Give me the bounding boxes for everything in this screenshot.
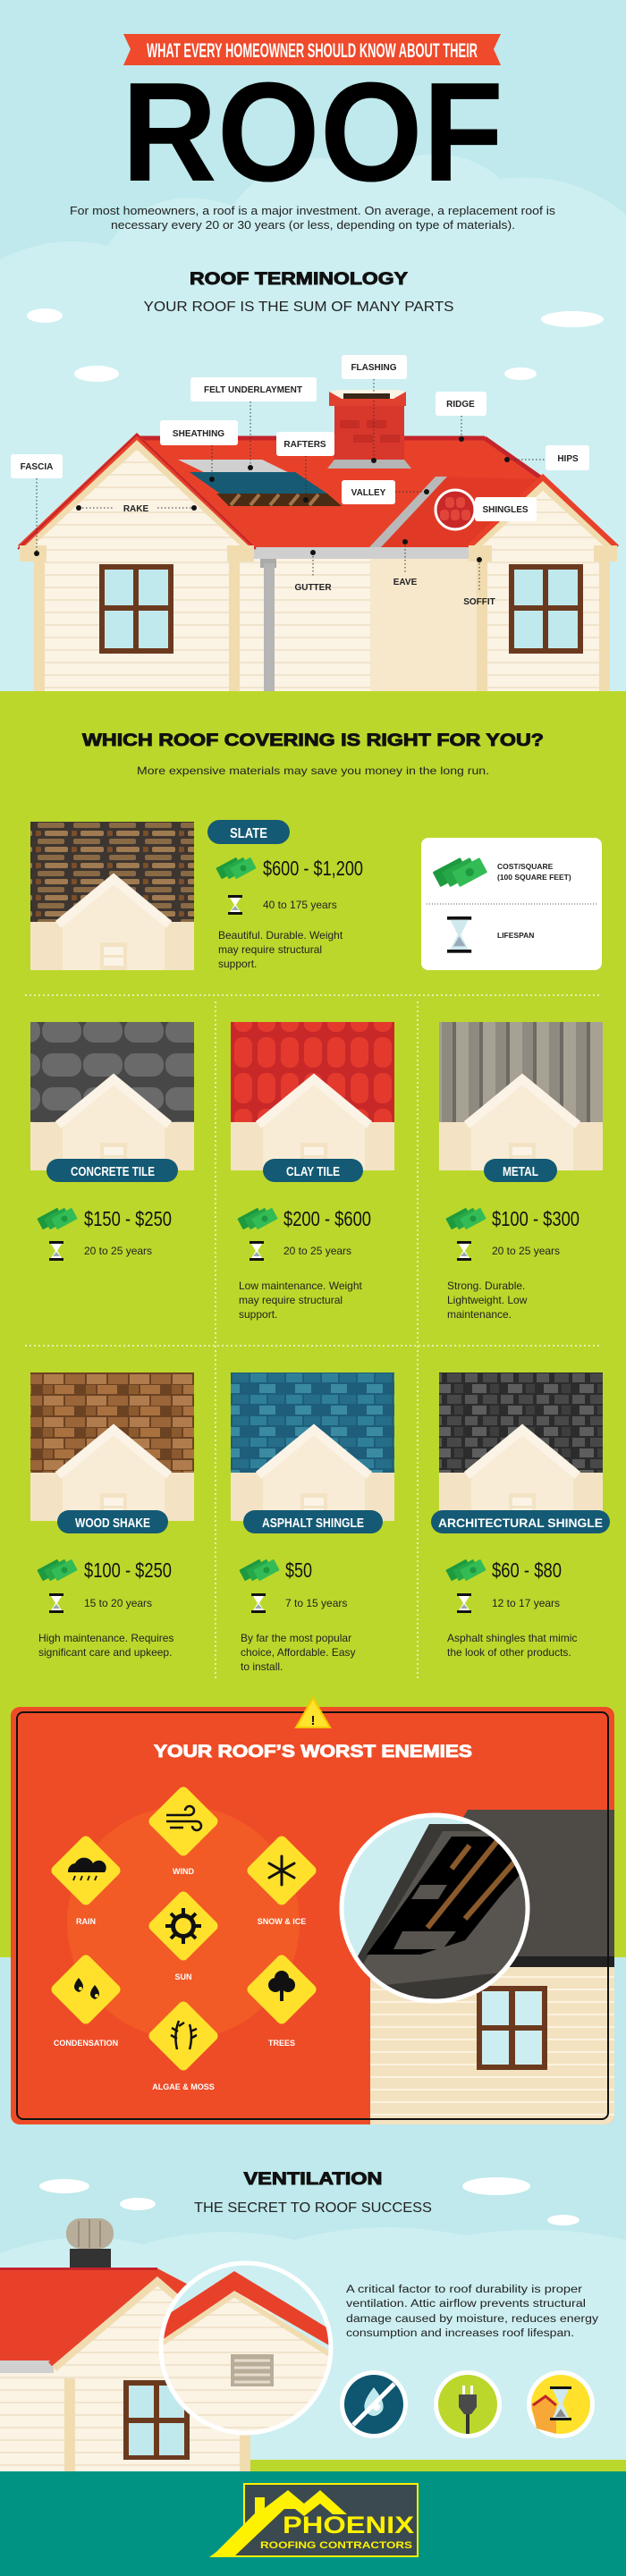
logo: ROOFING CONTRACTORS [260,2540,412,2551]
card: wood shake [30,1372,194,1659]
intro text: necessary every 20 or 30 years (or less, depending on type of materials). [111,219,515,232]
card: clay tile: Low maintenance. Weight [239,1280,363,1292]
card: architectural shingle: $60 - $80 [492,1558,562,1582]
card: architectural shingle: the look of other products. [447,1646,571,1659]
footer [0,2471,626,2576]
ventilation text: damage caused by moisture, reduces energy [346,2314,598,2325]
enemy: trees [245,1953,318,2048]
heading: roof terminology [143,270,453,315]
legend: COST/SQUARE [497,862,554,871]
card: clay tile: may require structural [239,1294,343,1306]
card: metal: Lightweight. Low [447,1294,528,1306]
enemy: trees: TREES [268,2039,295,2048]
card: concrete tile: $150 - $250 [84,1207,172,1230]
icon: warning [296,1698,330,1728]
enemy: condensation [49,1953,123,2048]
card: architectural shingle [431,1372,610,1659]
card: metal: maintenance. [447,1308,512,1321]
ventilation house [0,2218,626,2471]
card: architectural shingle: ARCHITECTURAL SHINGLE [438,1516,603,1530]
ventilation text [346,2285,598,2339]
card: clay tile: support. [239,1308,277,1321]
card: clay tile: CLAY TILE [286,1164,340,1179]
heading: roof terminology: YOUR ROOF IS THE SUM OF MANY PARTS [143,300,453,315]
enemy: algae & moss: ALGAE & MOSS [152,2082,215,2091]
card: clay tile: $200 - $600 [283,1207,371,1230]
card: wood shake: 15 to 20 years [84,1597,152,1609]
heading: which roof covering: WHICH ROOF COVERING IS RIGHT FOR YOU? [82,731,544,750]
card: asphalt shingle [231,1372,394,1673]
card: metal: Strong. Durable. [447,1280,525,1292]
enemy: sun [147,1889,220,1981]
legend [421,838,602,970]
terminology labels: RAFTERS [283,440,326,450]
card: metal: $100 - $300 [492,1207,579,1230]
card: slate: SLATE [230,826,267,841]
terminology labels: SHEATHING [173,429,224,439]
icon: warning: ! [311,1713,315,1728]
card: slate: 40 to 175 years [263,899,337,911]
terminology labels: EAVE [393,578,418,587]
card: clay tile [231,1022,394,1321]
icon: close-up circle [340,1813,529,2003]
card: metal: METAL [503,1164,538,1179]
terminology labels: SOFFIT [463,597,495,607]
card: concrete tile [30,1022,194,1261]
card: metal [439,1022,603,1321]
terminology labels: VALLEY [351,488,386,498]
card: slate: may require structural [218,943,322,956]
enemy: rain: RAIN [76,1917,96,1926]
terminology labels: FELT UNDERLAYMENT [204,385,302,395]
terminology labels: FLASHING [351,363,397,373]
heading: ventilation: VENTILATION [243,2170,383,2189]
card: wood shake: $100 - $250 [84,1558,172,1582]
heading: roof terminology: ROOF TERMINOLOGY [190,270,408,289]
logo [212,2484,418,2556]
enemy: snow & ice [245,1834,318,1926]
terminology labels: HIPS [557,454,579,464]
card: architectural shingle: Asphalt shingles that mimic [447,1632,577,1644]
card: slate: $600 - $1,200 [263,857,363,880]
icon: no moisture [340,2370,408,2438]
title: YOUR ROOF’S WORST ENEMIES [154,1743,472,1761]
card: asphalt shingle: By far the most popular [241,1632,351,1644]
banner [123,34,501,65]
card: asphalt shingle: ASPHALT SHINGLE [262,1516,364,1531]
ventilation text: consumption and increases roof lifespan. [346,2328,574,2339]
enemy: wind [147,1785,220,1876]
logo: PHOENIX [283,2512,414,2538]
heading: ventilation: THE SECRET TO ROOF SUCCESS [194,2200,432,2216]
icon: energy plug [434,2370,502,2438]
icon: lifespan [527,2370,595,2438]
terminology labels: RAKE [123,504,148,514]
card: concrete tile: CONCRETE TILE [71,1164,155,1179]
green section background [0,691,626,1957]
card: architectural shingle: 12 to 17 years [492,1597,560,1609]
card: slate: support. [218,958,257,970]
title ROOF: ROOF [122,54,503,211]
intro text: For most homeowners, a roof is a major investment. On average, a replacement roof is [70,205,555,217]
dividers [25,995,599,1681]
legend: (100 SQUARE FEET) [497,873,571,882]
card: asphalt shingle: $50 [285,1558,312,1582]
card: slate [30,820,363,970]
card: wood shake: significant care and upkeep. [38,1646,172,1659]
card: asphalt shingle: 7 to 15 years [285,1597,347,1609]
ventilation text: ventilation. Attic airflow prevents structural [346,2299,586,2310]
enemy: sun: SUN [174,1972,192,1981]
background sky [0,0,626,691]
enemy: rain [49,1834,123,1926]
heading: ventilation [194,2170,432,2216]
card: asphalt shingle: to install. [241,1660,283,1673]
card: wood shake: WOOD SHAKE [75,1516,150,1531]
house diagram [18,390,617,691]
terminology labels: SHINGLES [482,505,529,515]
enemy: snow & ice: SNOW & ICE [258,1917,306,1926]
card: clay tile: 20 to 25 years [283,1245,351,1257]
card: wood shake: High maintenance. Requires [38,1632,173,1644]
ventilation background [39,2177,579,2225]
enemy: wind: WIND [173,1867,194,1876]
terminology labels: GUTTER [294,583,332,593]
heading: which roof covering: More expensive materials may save you money in the long run. [137,764,489,777]
terminology labels: RIDGE [446,400,475,410]
ventilation text: A critical factor to roof durability is proper [346,2285,582,2295]
card: slate: Beautiful. Durable. Weight [218,929,343,942]
callout: attic vent zoom [152,2262,340,2434]
legend: LIFESPAN [497,931,534,940]
terminology labels [11,355,589,607]
enemy: algae & moss [147,1999,220,2091]
enemy: condensation: CONDENSATION [54,2039,118,2048]
panel: worst enemies [11,1698,614,2124]
heading: which roof covering [82,731,544,777]
card: concrete tile: 20 to 25 years [84,1245,152,1257]
intro text [70,205,555,232]
terminology labels: FASCIA [21,462,53,472]
card: asphalt shingle: choice, Affordable. Easy [241,1646,356,1659]
card: metal: 20 to 25 years [492,1245,560,1257]
